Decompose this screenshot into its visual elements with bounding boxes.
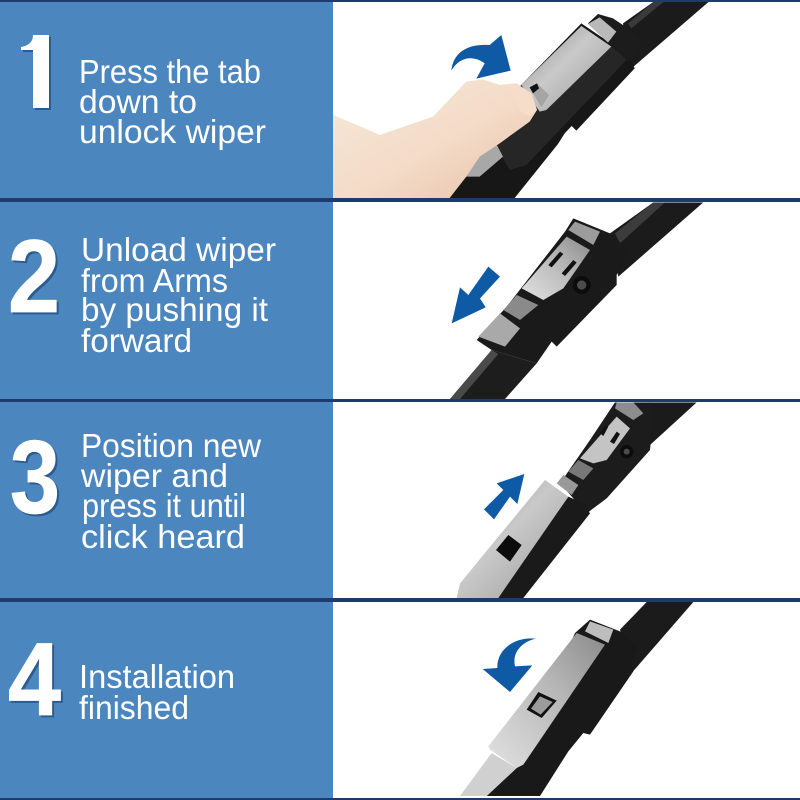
photo: wiper removed [450,202,703,399]
step 4 text: Installation [79,658,235,695]
step 3 text [80,427,261,555]
thumbnail [500,83,537,117]
number 2: 2 [8,219,60,335]
panel: step 3 [0,400,697,600]
panel: step 1 [0,0,710,200]
step 3 text: Position new [81,427,261,464]
number 3: 3 [10,420,60,536]
photo: thumb pressing tab [333,1,710,198]
number 4: 4 [8,622,61,738]
panel: step 2 [0,200,703,400]
number 1: 1 [8,15,66,131]
step 1 text: Press the tab [79,53,261,90]
arrow: straight down-left [452,267,500,323]
step 3 text: click heard [81,518,245,555]
step 3 text: wiper and [80,457,228,494]
number 1 [21,35,51,110]
panel: step 4 [0,600,693,800]
photo: wiper installed [460,602,693,796]
step 1 text: down to [79,83,197,120]
step 3 text: press it until [82,487,246,524]
step 2 text: Unload wiper [81,231,276,268]
step 2 text: by pushing it [81,291,268,328]
step 1 text [79,53,266,150]
step 4 text: finished [79,689,189,726]
arrow: curved [451,35,511,79]
arrow: curved down-left [483,638,536,692]
arrow: straight up-right [484,474,524,519]
step 2 text [81,231,276,359]
step 4 text [79,658,235,726]
photo: new wiper positioned [457,402,697,598]
step 2 text: forward [81,322,192,359]
step 2 text: from Arms [81,262,228,299]
hand [333,79,537,198]
step 1 text: unlock wiper [79,113,266,150]
